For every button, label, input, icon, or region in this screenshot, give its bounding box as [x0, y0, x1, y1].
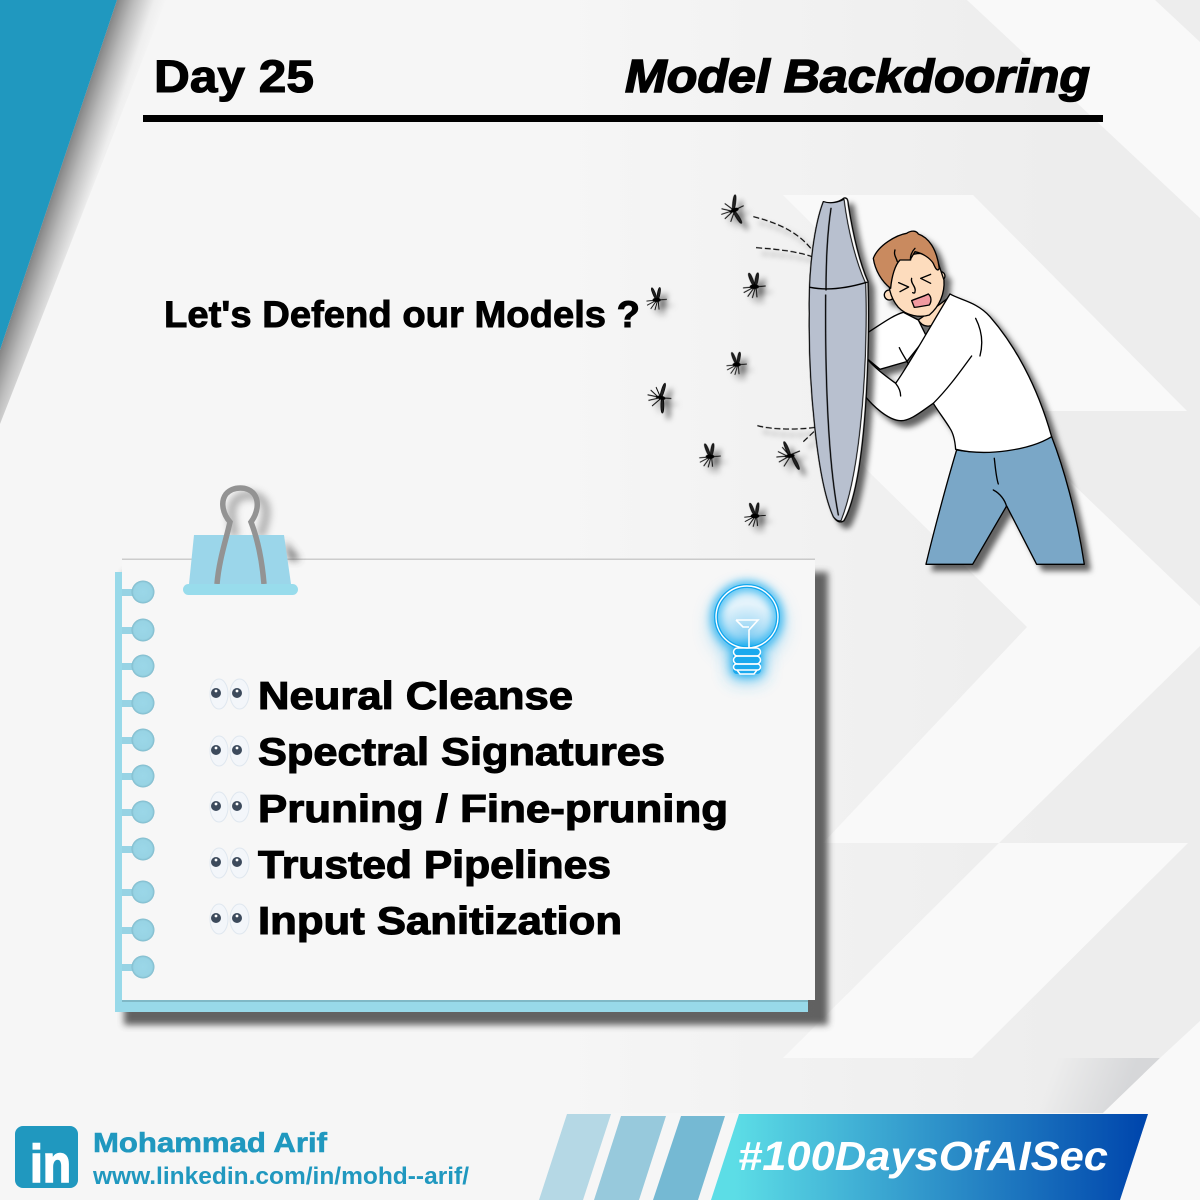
back arm	[867, 312, 927, 369]
hashtag ribbon	[711, 1114, 1148, 1200]
notebook page	[122, 560, 815, 1000]
subheading: Let's Defend our Models ?	[164, 294, 640, 335]
header	[143, 50, 1103, 122]
hashtag: #100DaysOfAISec	[738, 1133, 1108, 1179]
item: Neural Cleanse: Neural Cleanse	[258, 675, 573, 718]
item: Spectral Signatures: Spectral Signatures	[258, 731, 665, 774]
icon: LinkedIn: in	[30, 1135, 71, 1194]
defense list	[210, 675, 728, 943]
footer: hashtag banner	[539, 1114, 1148, 1200]
panel: notebook with defenses	[115, 488, 828, 1025]
mosquitoes and flight paths	[644, 193, 820, 527]
man	[864, 231, 1084, 564]
spiral rings	[122, 580, 154, 978]
clothing folds	[896, 318, 1007, 507]
header rule	[143, 115, 1103, 122]
notebook back sheet	[115, 572, 808, 1012]
ears	[884, 272, 945, 300]
neck	[918, 297, 950, 326]
item: Trusted Pipelines: Trusted Pipelines	[258, 844, 611, 887]
illustration: man blocking mosquitoes with a shield	[644, 193, 1084, 564]
icon: LinkedIn	[15, 1126, 78, 1194]
corner shape	[0, 0, 166, 424]
facial features	[895, 248, 931, 293]
hair	[873, 231, 939, 288]
notebook shadow	[124, 572, 828, 1025]
sweater and front arm	[864, 294, 1052, 452]
author name: Mohammad Arif	[93, 1127, 328, 1158]
item: Input Sanitization: Input Sanitization	[258, 900, 622, 943]
item: Pruning / Fine-pruning: Pruning / Fine-pruning	[258, 788, 728, 831]
icon: neon light bulb	[711, 586, 783, 680]
icon: binder clip	[183, 488, 300, 595]
mouth	[912, 294, 931, 307]
decorative stripes	[539, 1114, 725, 1200]
face	[889, 254, 944, 316]
profile url: www.linkedin.com/in/mohd--arif/	[92, 1163, 469, 1190]
shield	[809, 198, 868, 522]
day label: Day 25	[154, 51, 314, 102]
footer: author credit	[15, 1126, 469, 1194]
trousers	[926, 437, 1084, 564]
topic title: Model Backdooring	[625, 50, 1090, 102]
